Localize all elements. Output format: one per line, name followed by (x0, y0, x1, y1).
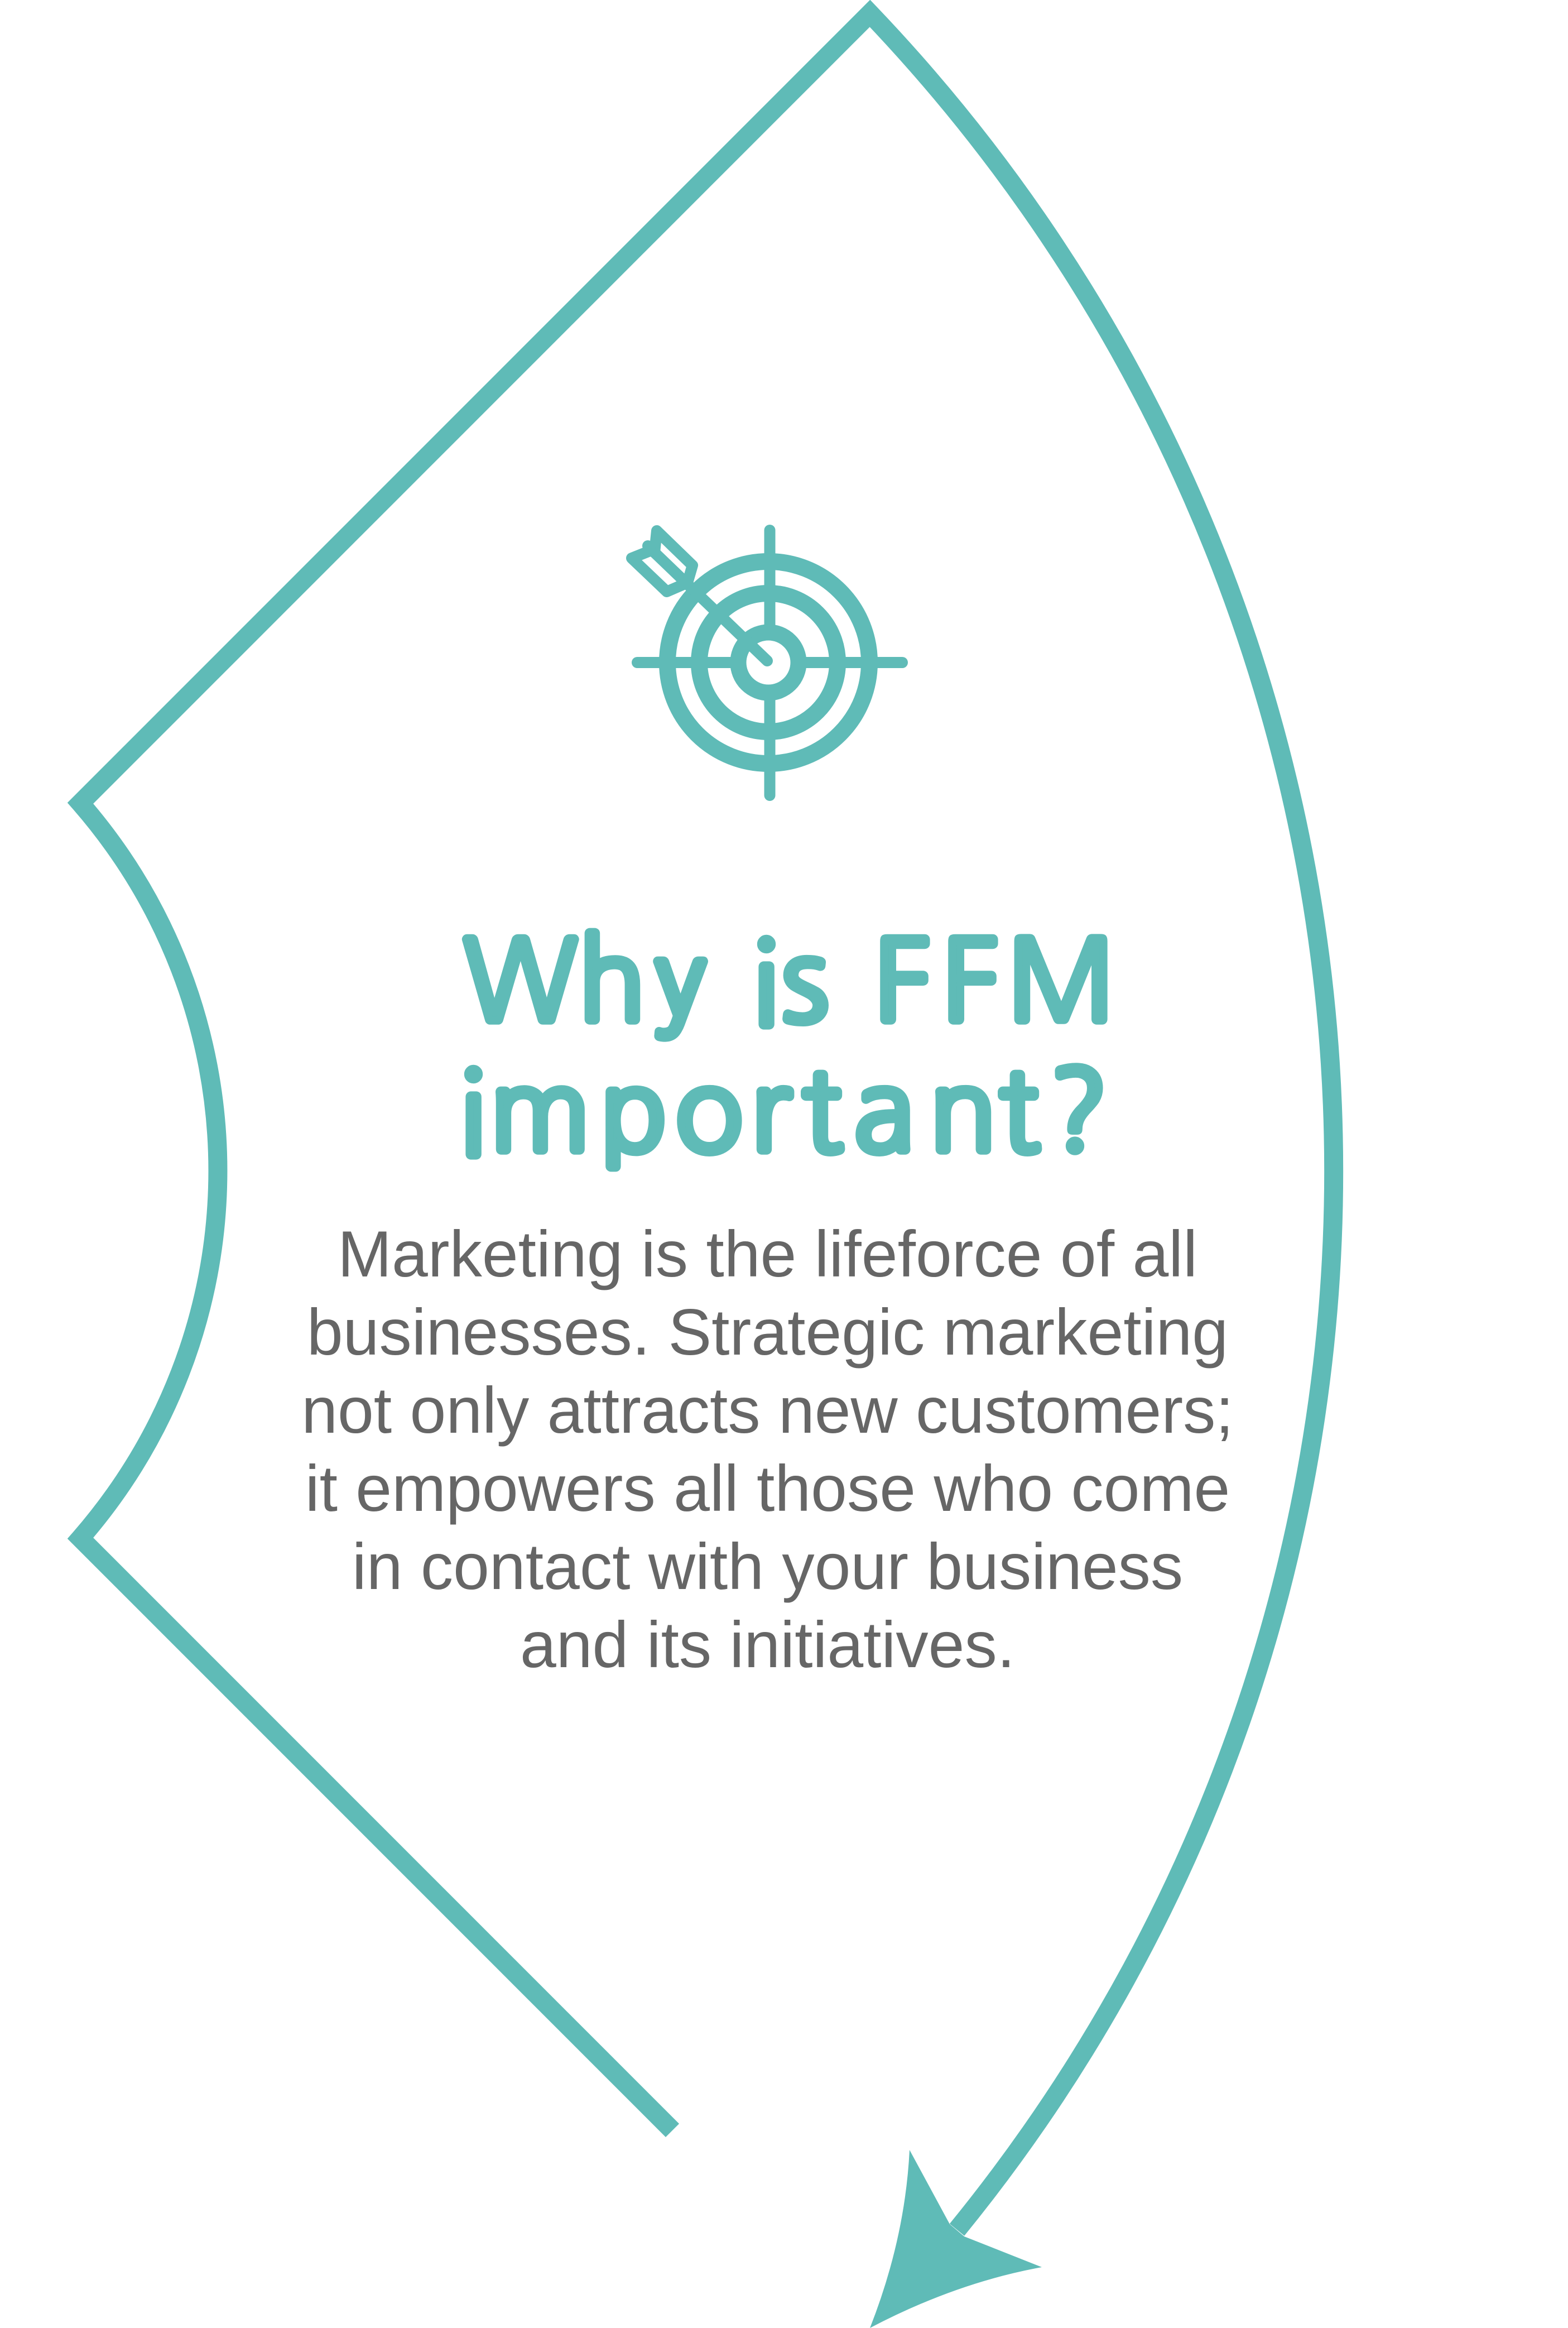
body text: in contact with your business (352, 1530, 1183, 1603)
arrow outline frame (80, 13, 1334, 2230)
heading: important? (459, 1055, 1108, 1168)
arrowhead (870, 2150, 1042, 2328)
body text: it empowers all those who come (305, 1452, 1230, 1525)
icon: target with arrow (632, 530, 902, 795)
body text: businesses. Strategic marketing (307, 1296, 1228, 1369)
body text (301, 1218, 1234, 1681)
body text: not only attracts new customers; (301, 1374, 1234, 1447)
heading: Why is FFM (463, 925, 1115, 1038)
body text: and its initiatives. (520, 1609, 1015, 1681)
heading (459, 925, 1115, 1168)
body text: Marketing is the lifeforce of all (338, 1218, 1197, 1290)
